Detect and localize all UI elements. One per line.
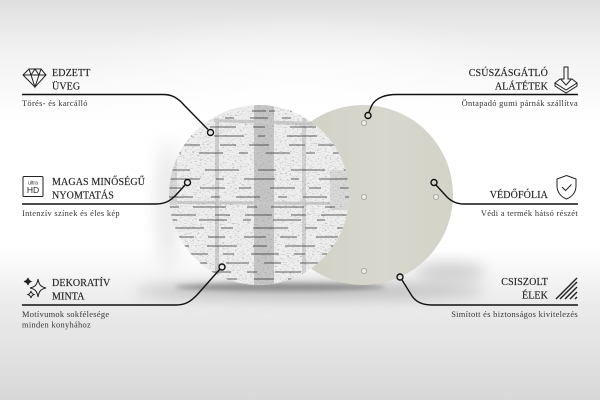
callout: protective foil	[431, 176, 578, 218]
connector line	[22, 185, 185, 204]
callout: tempered glass	[22, 68, 214, 136]
heading: EDZETT	[52, 68, 90, 79]
brick texture	[169, 105, 349, 285]
description: Motívumok sokfélesége	[22, 310, 109, 319]
heading: ÉLEK	[522, 290, 549, 302]
heading: MINTA	[52, 292, 85, 302]
callout: polished edges	[397, 274, 578, 319]
icon: sparkles	[24, 278, 46, 298]
description: minden konyhához	[22, 320, 91, 330]
heading: CSÚSZÁSGÁTLÓ	[469, 67, 548, 79]
connector line	[436, 185, 578, 204]
connector line	[402, 280, 578, 305]
window light and shadow	[169, 105, 349, 285]
description: Törés- és karcálló	[22, 99, 88, 108]
icon: shield	[557, 176, 576, 199]
heading: CSISZOLT	[501, 277, 548, 288]
heading: DEKORATÍV	[52, 277, 111, 289]
callout: anti-slip pads	[365, 67, 578, 118]
callout: decorative pattern	[22, 264, 225, 330]
connector line	[22, 269, 220, 305]
connector line	[22, 94, 208, 130]
heading: NYOMTATÁS	[52, 190, 114, 202]
icon: ultra HD: ultra	[28, 180, 38, 186]
icon: pad with arrow	[555, 67, 577, 93]
icon: rubber pads	[361, 120, 439, 274]
description: Öntapadó gumi párnák szállítva	[462, 99, 578, 108]
connector line	[369, 94, 578, 112]
description: Simított és biztonságos kivitelezés	[451, 310, 578, 319]
icon: ultra HD: HD	[27, 185, 39, 195]
front disc: white brick print	[169, 105, 349, 285]
back disc: grey protective foil side	[273, 105, 453, 285]
callout: high quality print	[22, 176, 190, 218]
heading: ALÁTÉTEK	[495, 80, 549, 92]
heading: ÜVEG	[52, 80, 80, 92]
description: Intenzív színek és éles kép	[22, 209, 120, 218]
description: Védi a termék hátsó részét	[481, 209, 578, 218]
heading: MAGAS MINŐSÉGŰ	[52, 176, 146, 188]
disc shadow	[135, 140, 485, 300]
heading: VÉDŐFÓLIA	[490, 189, 549, 201]
icon: ultra HD	[23, 176, 43, 196]
icon: diagonal stripes	[556, 278, 577, 299]
icon: diamond	[23, 69, 46, 87]
